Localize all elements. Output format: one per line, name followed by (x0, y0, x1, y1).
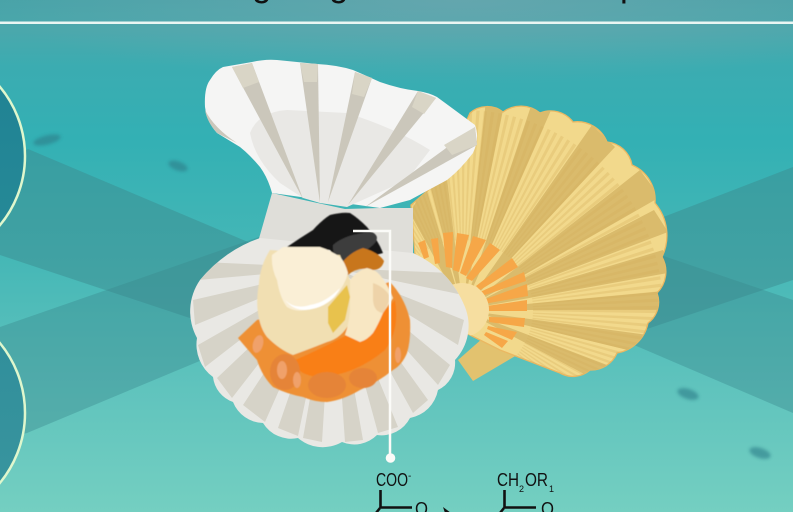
icon: yellow scallop shell (410, 106, 668, 381)
chemical formula: carboxylate sugar (376, 470, 428, 512)
chemical formula: substituted sugar: CH (497, 470, 519, 490)
chemical formula: substituted sugar: OR (525, 470, 548, 490)
panel: lower left circle (0, 303, 25, 512)
upper shell rib caps (232, 63, 477, 155)
right adductor lobe (345, 268, 393, 342)
light beams: right (620, 167, 793, 413)
callout line (353, 231, 395, 463)
shell hinge (258, 193, 413, 262)
roe highlights (251, 334, 401, 388)
roe lumps (270, 354, 377, 398)
chemical formula: substituted sugar (497, 470, 554, 512)
panel: upper left circle (0, 48, 25, 264)
chemical formula: substituted sugar: 2 (519, 484, 524, 494)
chemical formula: carboxylate sugar: COO (376, 470, 408, 490)
upper shell ribs (205, 63, 477, 207)
clipped title text (252, 0, 639, 4)
bright roe patch (293, 300, 396, 377)
lower shell ribs (193, 262, 464, 442)
upper shell inner patch (250, 110, 430, 207)
black mantle (287, 213, 383, 265)
icon: distant fish group (32, 132, 772, 461)
icon: lower scallop shell (190, 193, 469, 447)
cream adductor (257, 250, 352, 355)
adductor gleam (285, 288, 340, 310)
lobe shade (373, 283, 391, 313)
chemical formula: substituted sugar: 1 (549, 484, 554, 494)
mantle grey sheen (333, 232, 377, 262)
scallop meat (238, 213, 410, 402)
brown gonad tip (340, 248, 384, 275)
orange roe (238, 282, 410, 402)
yellow fold (328, 285, 350, 333)
light beams: left (0, 149, 262, 440)
adductor top highlight (272, 247, 348, 311)
yellow shell bottom ear (458, 338, 517, 381)
orange inner ring segments (418, 232, 528, 348)
chemical formula: carboxylate sugar: - (408, 471, 411, 482)
icon: white upper scallop shell (205, 60, 477, 208)
title divider line (0, 22, 793, 24)
chemical formula: ring linkage (443, 507, 451, 512)
